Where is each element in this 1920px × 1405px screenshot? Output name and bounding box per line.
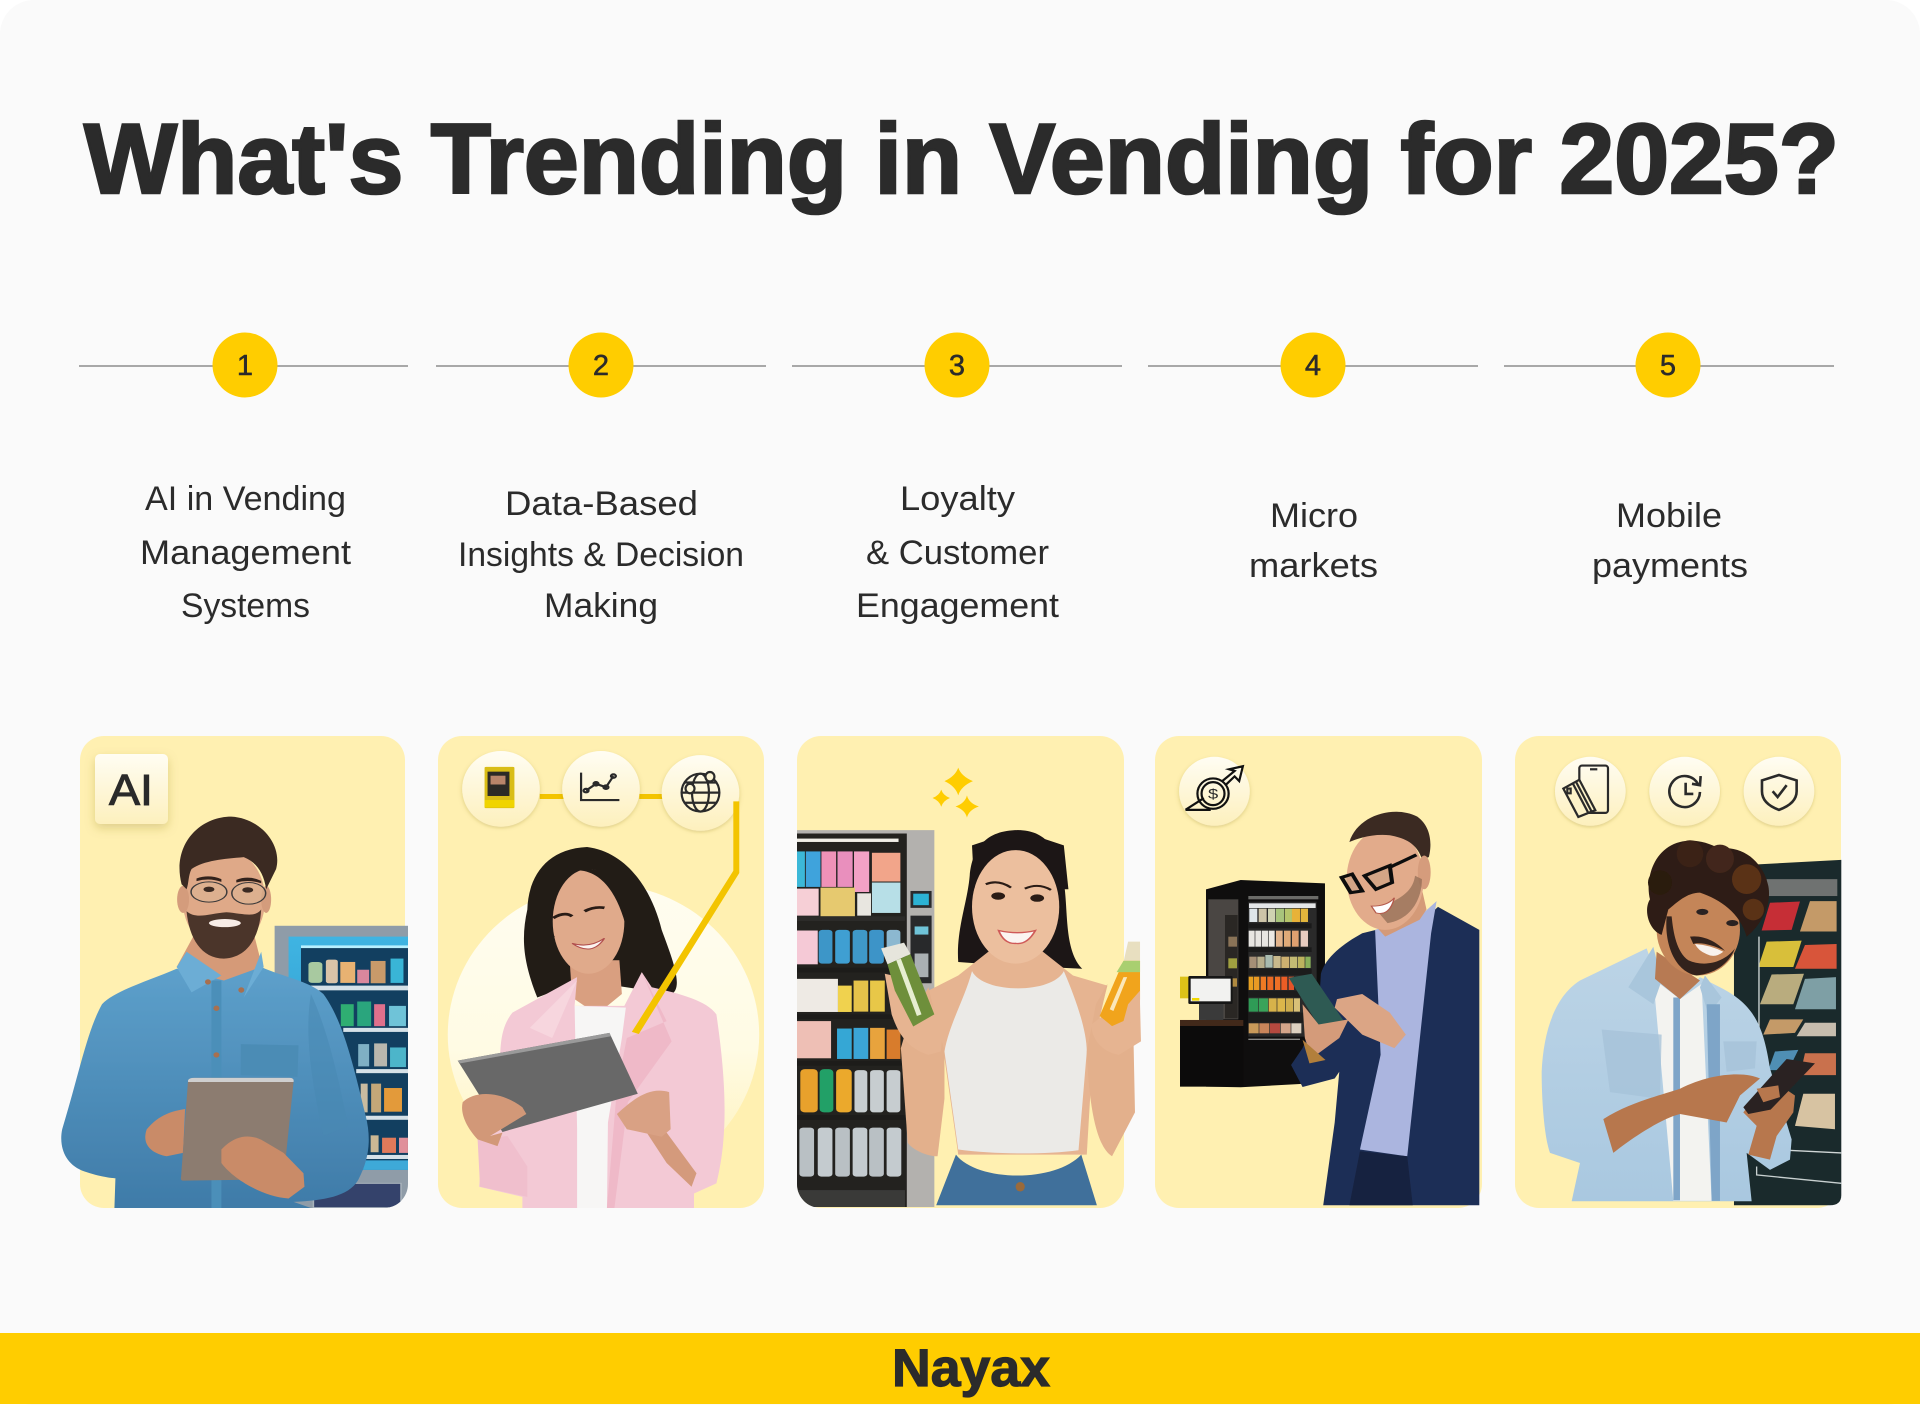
micro market fridge (1180, 880, 1325, 1087)
label 4: Micro markets: markets (1249, 547, 1378, 585)
icon: clock with arrow (1649, 757, 1720, 826)
panel: card 2 data-based insights (438, 736, 764, 1208)
label 4: Micro markets: Micro (1270, 497, 1358, 535)
label 3: Loyalty & Customer Engagement: & Customer (866, 534, 1049, 572)
footer bar with Nayax logo: Nayax (892, 1339, 1051, 1398)
step 5 header: 5 (1660, 350, 1676, 382)
step 1 header: 1 (237, 350, 253, 382)
step 3 header: 3 (949, 350, 965, 382)
label 1: AI in Vending Management Systems: AI in Vending (145, 480, 346, 518)
label 1: AI in Vending Management Systems: Systems (181, 587, 310, 625)
label 4: Micro markets (1249, 497, 1378, 585)
step 4 header: 4 (1305, 350, 1321, 382)
label 5: Mobile payments: payments (1592, 547, 1748, 585)
step 2 header: 2 (593, 350, 609, 382)
person: woman with tablet (458, 847, 725, 1208)
icon: rising dollar (1179, 757, 1250, 826)
icon: AI badge: AI (109, 766, 153, 815)
panel: card 3 loyalty (797, 736, 1141, 1208)
person: man with phone (1542, 840, 1815, 1201)
connector lines (540, 794, 664, 799)
label 5: Mobile payments (1592, 497, 1748, 585)
label 2: Data-Based Insights & Decision Making (458, 485, 744, 625)
label 3: Loyalty & Customer Engagement (856, 480, 1060, 625)
footer bar with Nayax logo (0, 1333, 1920, 1404)
vending machine illustration (1734, 860, 1841, 1205)
step 4 header (1148, 332, 1478, 398)
title: What's Trending in Vending for 2025? (84, 103, 1839, 214)
step 1 header (79, 332, 408, 398)
icon: globe with pins (662, 755, 739, 831)
label 2: Data-Based Insights & Decision Making: Data-Based (505, 485, 698, 523)
backdrop circle (448, 884, 759, 1185)
label 1: AI in Vending Management Systems: Management (140, 534, 352, 572)
step 5 header (1504, 332, 1834, 398)
icon: phone and card (1555, 757, 1626, 826)
vending machine illustration (797, 830, 934, 1207)
person: man with phone (1289, 812, 1479, 1205)
panel: card 5 mobile payments (1515, 736, 1841, 1208)
label 5: Mobile payments: Mobile (1616, 497, 1722, 535)
person: woman with bottles (881, 830, 1141, 1205)
label 3: Loyalty & Customer Engagement: Loyalty (900, 480, 1015, 518)
step 3 header (792, 332, 1122, 398)
icon: sparkles (933, 768, 979, 818)
vending machine illustration (275, 926, 409, 1208)
label 1: AI in Vending Management Systems (140, 480, 352, 625)
label 2: Data-Based Insights & Decision Making: Insights & Decision (458, 536, 744, 574)
icon: AI badge (95, 754, 168, 824)
label 3: Loyalty & Customer Engagement: Engagement (856, 587, 1060, 625)
icon: line chart (562, 751, 640, 827)
arrow: yellow connector line (632, 801, 739, 1034)
step 2 header (436, 332, 766, 398)
icon: shield check (1744, 757, 1814, 826)
label 2: Data-Based Insights & Decision Making: Making (544, 587, 658, 625)
panel: card 1 AI in vending (61, 736, 409, 1208)
icon: rising dollar: $ (1208, 787, 1218, 802)
icon: payment device (462, 751, 540, 827)
panel: card 4 micro markets (1155, 736, 1482, 1208)
person: man with tablet (61, 817, 369, 1208)
